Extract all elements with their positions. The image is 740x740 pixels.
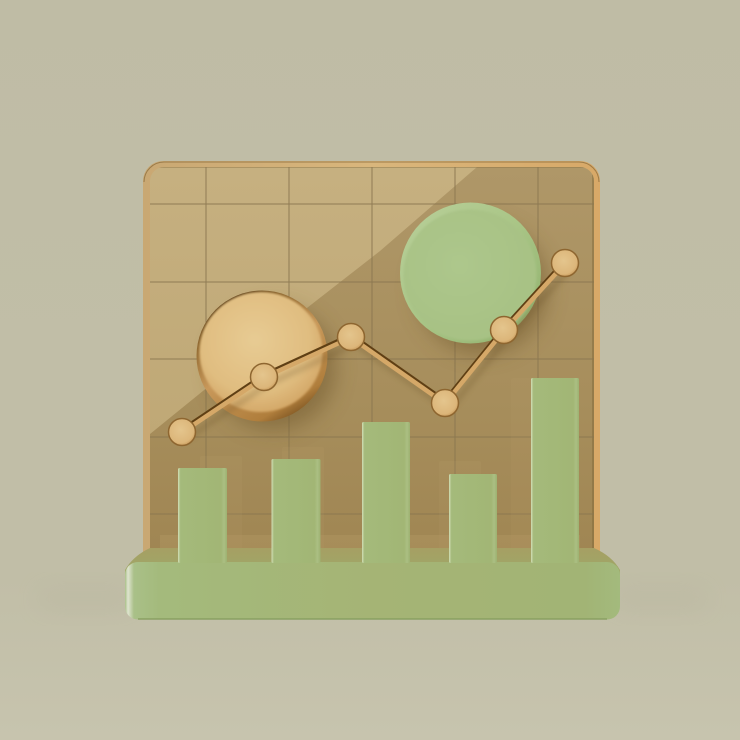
data points: [168, 250, 578, 446]
bar 2: [272, 459, 320, 563]
faint glass bar reflections: [160, 378, 580, 551]
frame dark top edge: [144, 162, 599, 182]
line highlight: [182, 264, 565, 432]
panel: back board with gold frame: [143, 161, 600, 556]
grid lines: [150, 167, 594, 550]
icon: gold coin: [196, 290, 328, 422]
bar chart: [178, 378, 579, 563]
base highlight edge: [138, 562, 607, 565]
diagonal shadow on board: [150, 167, 594, 550]
base front face: [125, 562, 620, 620]
base bottom edge: [138, 618, 607, 620]
bar 1: [178, 468, 227, 563]
bar 5: [531, 378, 579, 563]
icon: green circle: [400, 202, 541, 344]
line dark underside: [182, 262, 565, 431]
bar 4: [449, 474, 497, 563]
base platform: [125, 548, 620, 620]
base top surface: [125, 548, 620, 580]
line shadow: [186, 270, 569, 439]
illustration: 3D chart scene: [125, 161, 620, 620]
bar 3: [362, 422, 410, 563]
floor shadows: [40, 590, 705, 608]
line chart: [168, 250, 578, 446]
board shadows of circles: [212, 222, 548, 430]
